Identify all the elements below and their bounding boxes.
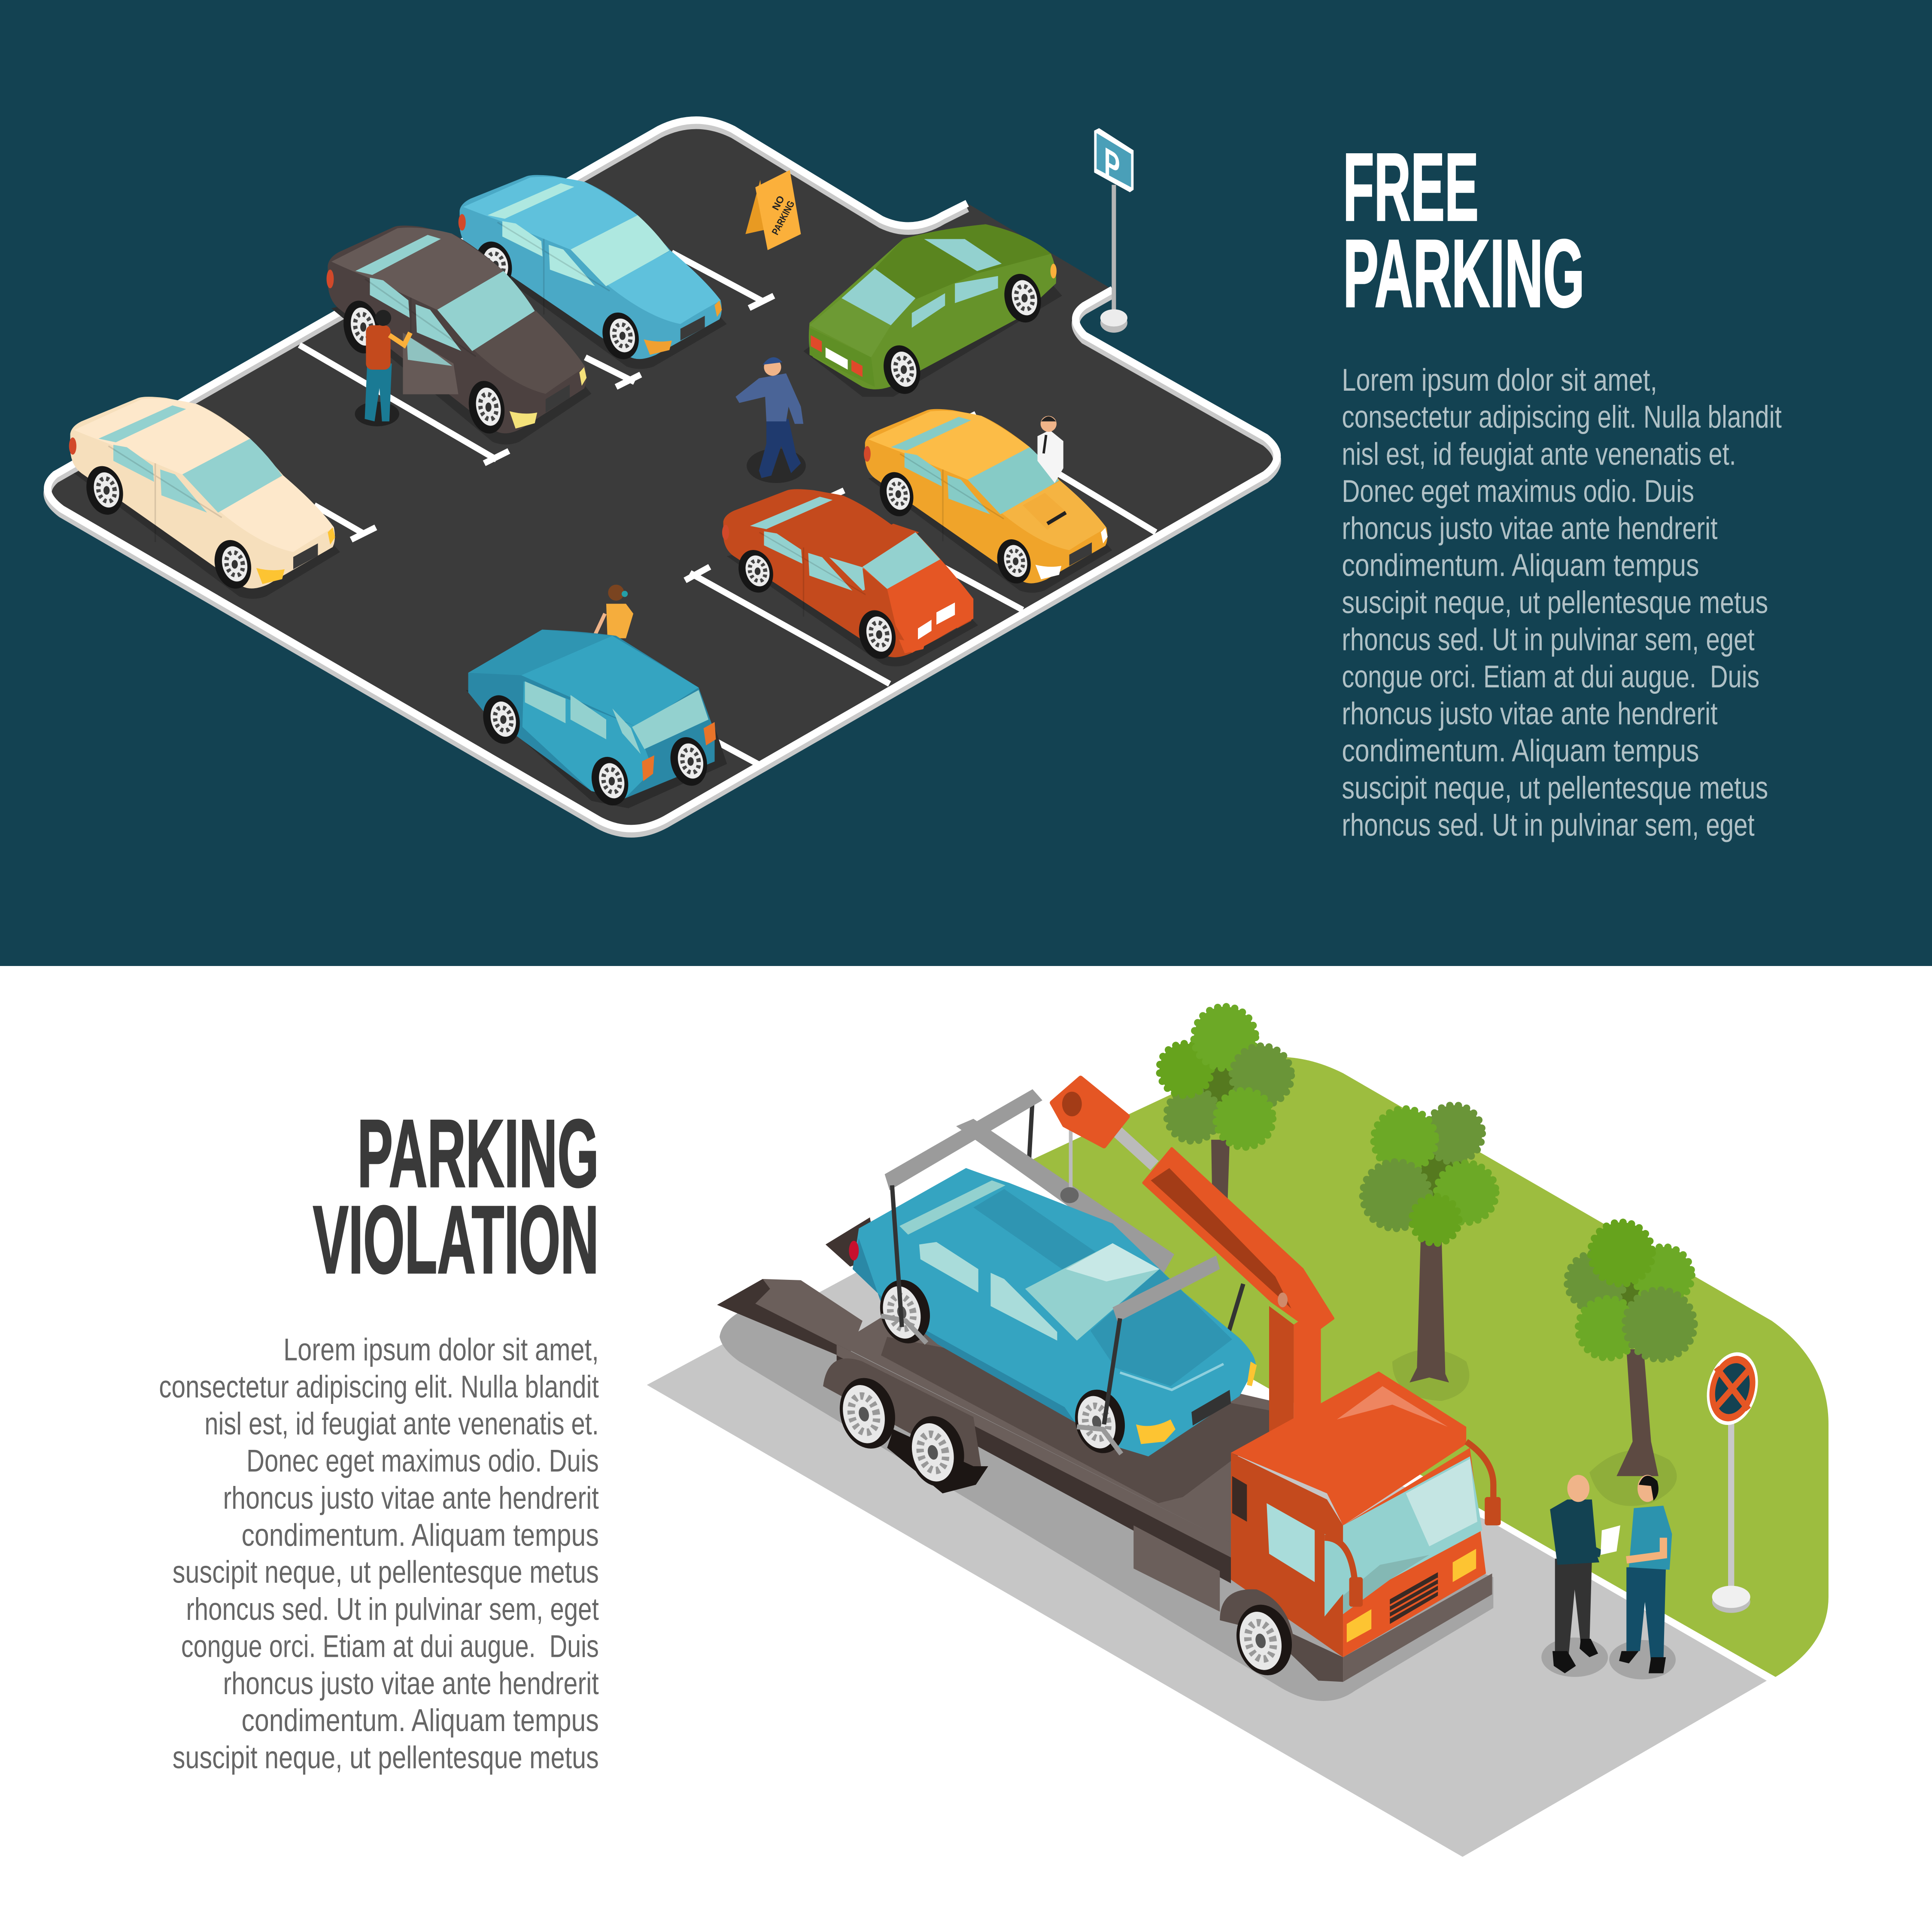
parking sign P: P (1104, 138, 1120, 192)
crane column and boom (1052, 1078, 1333, 1454)
text block: free parking: condimentum. Aliquam tempus (1342, 548, 1699, 583)
road (647, 1269, 1767, 1857)
text block: parking violation: rhoncus sed. Ut in pulvinar sem, eget (186, 1592, 599, 1627)
text block: free parking: suscipit neque, ut pellentesque metus (1342, 585, 1768, 620)
car: green sedan (803, 224, 1062, 398)
grass area (1033, 1057, 1829, 1677)
parking lot illustration (48, 120, 1277, 833)
no parking sign: NO (770, 194, 787, 212)
text block: parking violation: suscipit neque, ut pellentesque metus (173, 1555, 599, 1590)
no parking sign: PARKING (769, 199, 797, 237)
tree 2 (1363, 1105, 1496, 1401)
text block: free parking: condimentum. Aliquam tempus (1342, 733, 1699, 769)
lifting frame rear bars (885, 1089, 1174, 1274)
text block: free parking: rhoncus sed. Ut in pulvinar sem, eget (1342, 807, 1755, 842)
text block: parking violation: congue orci. Etiam at dui augue. Duis (181, 1628, 599, 1664)
person: man with backpack (355, 310, 410, 426)
panel: free parking background (0, 0, 1932, 966)
heading: free parking: FREE (1343, 134, 1479, 241)
car: beige sedan (69, 397, 340, 599)
text block: free parking: rhoncus sed. Ut in pulvinar sem, eget (1342, 622, 1755, 657)
paper document (1601, 1525, 1620, 1555)
person: man in white shirt (1037, 416, 1063, 483)
heading: free parking: PARKING (1343, 220, 1585, 327)
towed blue car (849, 1168, 1257, 1458)
text block: free parking: rhoncus justo vitae ante hendrerit (1342, 696, 1718, 731)
hook cable (1060, 1127, 1079, 1203)
no parking sign (745, 170, 801, 250)
truck flatbed (823, 1312, 1272, 1612)
panel: parking violation background (0, 966, 1932, 1932)
kerb line (1497, 1522, 1771, 1680)
truck rear wheels (832, 1372, 988, 1493)
text block: free parking: suscipit neque, ut pellentesque metus (1342, 770, 1768, 805)
truck loading ramp (717, 1279, 863, 1355)
person: man in blue shirt (1609, 1475, 1676, 1680)
text block: parking violation: consectetur adipiscing elit. Nulla blandit (159, 1369, 599, 1404)
text block: parking violation: condimentum. Aliquam tempus (242, 1703, 599, 1738)
text block: free parking: rhoncus justo vitae ante hendrerit (1342, 510, 1718, 546)
text block: free parking: Lorem ipsum dolor sit amet, (1342, 362, 1657, 398)
text block: parking violation: condimentum. Aliquam tempus (242, 1517, 599, 1552)
text block: parking violation: nisl est, id feugiat ante venenatis et. (204, 1406, 599, 1441)
tree 3 (1567, 1222, 1694, 1506)
car: light blue (459, 175, 727, 369)
text block: parking violation: suscipit neque, ut pellentesque metus (173, 1740, 599, 1775)
car: yellow sports car (864, 409, 1112, 593)
no parking road sign (1700, 1347, 1765, 1613)
heading: parking violation (313, 1100, 599, 1294)
person: police officer (1541, 1475, 1608, 1677)
tow truck scene (647, 1007, 1829, 1857)
person: woman on phone (595, 585, 633, 638)
car: orange sedan (722, 489, 978, 666)
heading: free parking (1343, 134, 1585, 327)
text block: parking violation: Lorem ipsum dolor sit amet, (283, 1332, 599, 1367)
text block: parking violation: rhoncus justo vitae ante hendrerit (223, 1666, 599, 1701)
truck shadow (720, 1306, 1493, 1701)
text block: parking violation (159, 1332, 599, 1775)
text block: free parking: Donec eget maximus odio. Duis (1342, 474, 1694, 509)
heading: parking violation: PARKING (357, 1100, 599, 1207)
parking bay lines (299, 252, 1156, 764)
rear strut and back straps (826, 1099, 1243, 1337)
text block: free parking: nisl est, id feugiat ante venenatis et. (1342, 437, 1736, 472)
asphalt lot (48, 120, 1277, 833)
text block: free parking: consectetur adipiscing elit. Nulla blandit (1342, 399, 1782, 434)
text block: free parking: congue orci. Etiam at dui augue. Duis (1342, 659, 1759, 694)
truck cab (1220, 1371, 1501, 1682)
lifting frame front bar and straps (892, 1185, 1220, 1425)
car: brown suv (327, 225, 591, 445)
text block: parking violation: Donec eget maximus odio. Duis (246, 1443, 599, 1479)
text block: parking violation: rhoncus justo vitae ante hendrerit (223, 1480, 599, 1516)
parking sign P (1094, 128, 1133, 333)
car: teal hatchback (466, 630, 727, 809)
tree 1 (1160, 1007, 1291, 1214)
text block: free parking (1342, 362, 1782, 842)
heading: parking violation: VIOLATION (313, 1186, 599, 1294)
person: walking man (735, 357, 806, 483)
